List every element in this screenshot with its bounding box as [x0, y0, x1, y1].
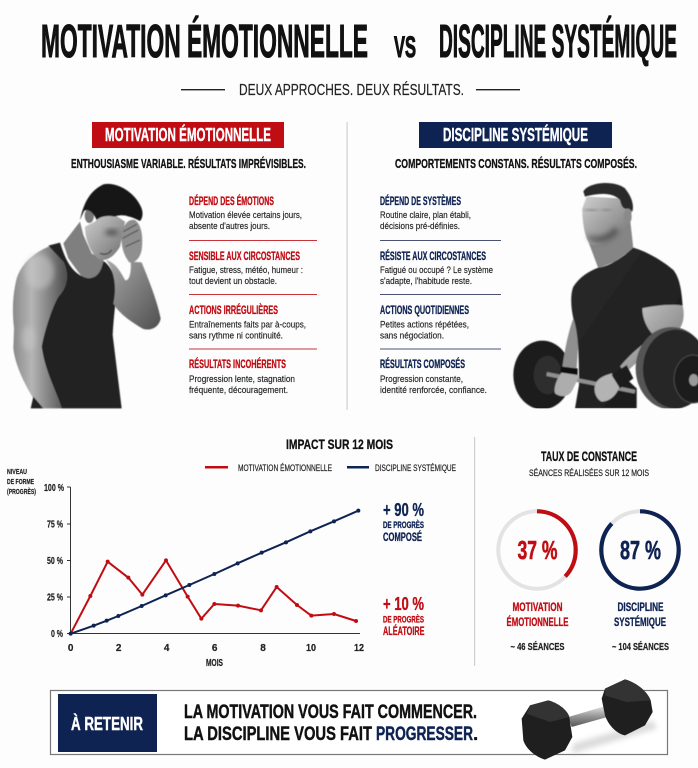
item: résiste aux circonstances — [380, 250, 493, 286]
item: actions irrégulières — [189, 304, 306, 340]
item: résiste aux circonstances: RÉSISTE AUX CIRCOSTANCES — [380, 250, 486, 263]
vertical divider — [474, 437, 475, 666]
label: discipline — [614, 602, 666, 629]
takeaway text: LA MOTIVATION VOUS FAIT COMMENCER. — [184, 702, 477, 723]
constance title: TAUX DE CONSTANCE — [541, 449, 637, 464]
takeaway text: LA DISCIPLINE VOUS FAIT — [184, 724, 372, 745]
y-axis title: NIVEAU — [7, 467, 27, 476]
item: résultats incohérents — [189, 358, 295, 395]
callout: +10 %: ALÉATOIRE — [383, 625, 425, 638]
axis labels: 100 % — [44, 483, 64, 494]
badge: motivation — [92, 122, 284, 148]
item: dépend des émotions: absente d'autres jours. — [189, 221, 270, 231]
callout: +90 %: COMPOSÉ — [383, 531, 422, 544]
photo: man lifting barbell — [513, 183, 698, 410]
donut: 87 %: 87 % — [620, 535, 661, 565]
badge: discipline — [419, 122, 612, 148]
item: actions quotidiennes: Petites actions répétées, — [380, 320, 469, 330]
item: résultats incohérents: Progression lente, stagnation — [189, 374, 295, 384]
chart axes — [67, 487, 360, 634]
axis labels: MOIS — [206, 658, 223, 669]
callout: +90 %: DE PROGRÈS — [383, 520, 424, 531]
axis labels: 4 — [164, 643, 170, 654]
callout: +10 %: DE PROGRÈS — [383, 614, 424, 626]
label: motivation — [506, 602, 569, 629]
takeaway text — [184, 702, 478, 745]
badge: motivation: MOTIVATION ÉMOTIONNELLE — [105, 124, 271, 145]
center divider — [346, 122, 348, 410]
item: résultats composés: RÉSULTATS COMPOSÉS — [380, 358, 465, 371]
item: sensible aux circonstances — [189, 251, 303, 286]
item: actions quotidiennes — [380, 305, 469, 340]
axis labels: 10 — [306, 643, 316, 654]
callout: +10 %: + 10 % — [383, 594, 424, 614]
axis labels: 8 — [260, 643, 266, 654]
item: résiste aux circonstances: s'adapte, l'habitude reste. — [380, 276, 472, 286]
item: actions quotidiennes: sans négociation. — [380, 330, 444, 340]
axis labels: 0 — [68, 643, 74, 654]
axis labels: 0 % — [51, 629, 63, 640]
callout: +90 % — [383, 500, 424, 544]
badge: discipline: DISCIPLINE SYSTÉMIQUE — [443, 124, 588, 145]
y-axis title: (PROGRÈS) — [7, 487, 36, 496]
takeaway text: . — [473, 724, 478, 745]
item: actions quotidiennes: ACTIONS QUOTIDIENNES — [380, 305, 469, 317]
item: résultats composés: identité renforcée, confiance. — [380, 385, 487, 395]
item: sensible aux circonstances: Fatigue, stress, météo, humeur : — [189, 265, 303, 275]
item: sensible aux circonstances: tout devient un obstacle. — [189, 276, 277, 286]
donut: 37 %: 37 % — [518, 535, 558, 565]
item: actions irrégulières: Entraînements faits par à-coups, — [189, 320, 306, 330]
count: 104 séances: ~ 104 SÉANCES — [612, 640, 669, 653]
panel: discipline — [380, 122, 698, 410]
chart legend — [205, 463, 456, 474]
label: motivation: MOTIVATION — [512, 602, 562, 614]
panel: motivation — [13, 122, 317, 408]
item: résiste aux circonstances: Fatigué ou occupé ? Le système — [380, 265, 493, 275]
item: actions irrégulières: ACTIONS IRRÉGULIÈRES — [189, 304, 278, 317]
axis labels: 6 — [212, 643, 218, 654]
y-axis title — [7, 467, 36, 496]
badge: à retenir — [58, 694, 157, 752]
motivation tagline: ENTHOUSIASME VARIABLE. RÉSULTATS IMPRÉVISIBLES. — [71, 156, 306, 171]
callout: +90 %: + 90 % — [383, 500, 424, 520]
title: MOTIVATION ÉMOTIONNELLE — [41, 15, 368, 67]
callout banner: à retenir — [50, 679, 668, 760]
callout: +10 % — [383, 594, 425, 638]
item: dépend de systèmes: Routine claire, plan établi, — [380, 210, 471, 220]
item: dépend des émotions: DÉPEND DES ÉMOTIONS — [189, 195, 274, 208]
line: motivation — [71, 558, 358, 634]
item: résultats composés: Progression constante, — [380, 374, 463, 384]
line: discipline — [69, 509, 360, 636]
takeaway text: PROGRESSER — [376, 724, 473, 745]
badge: à retenir: À RETENIR — [71, 713, 143, 734]
subtitle: DEUX APPROCHES. DEUX RÉSULTATS. — [239, 82, 464, 99]
constance subtitle: SÉANCES RÉALISÉES SUR 12 MOIS — [529, 468, 649, 479]
item: dépend des émotions — [189, 195, 302, 231]
axis labels: 50 % — [47, 556, 63, 567]
item: actions irrégulières: sans rythme ni continuité. — [189, 330, 283, 340]
photo: tired man — [13, 184, 161, 408]
y-axis title: DE FORME — [7, 477, 34, 486]
icon: dumbbell — [522, 679, 657, 760]
item: résultats composés — [380, 358, 487, 395]
item: résultats incohérents: RÉSULTATS INCOHÉRENTS — [189, 358, 286, 371]
item: dépend de systèmes: DÉPEND DE SYSTÈMES — [380, 195, 461, 208]
item: résultats incohérents: fréquente, découragement. — [189, 385, 288, 395]
axis labels: 75 % — [47, 520, 63, 530]
chart legend: DISCIPLINE SYSTÉMIQUE — [375, 463, 456, 474]
item: sensible aux circonstances: SENSIBLE AUX CIRCOSTANCES — [189, 251, 300, 263]
label: motivation: ÉMOTIONNELLE — [506, 616, 569, 629]
axis labels: 25 % — [47, 592, 63, 604]
line chart — [44, 483, 364, 669]
chart legend: MOTIVATION ÉMOTIONNELLE — [238, 463, 332, 474]
label: discipline: DISCIPLINE — [618, 602, 664, 614]
label: discipline: SYSTÉMIQUE — [614, 616, 666, 629]
axis labels — [44, 483, 364, 669]
axis labels: 12 — [354, 643, 364, 654]
donut: 37 % — [498, 511, 576, 589]
section title: impact: IMPACT SUR 12 MOIS — [286, 436, 393, 452]
item: dépend de systèmes — [380, 195, 471, 231]
donut: 87 % — [601, 511, 679, 589]
item: dépend de systèmes: décisions pré-définies. — [380, 221, 460, 231]
axis labels: 2 — [116, 643, 122, 654]
panel: taux de constance — [498, 449, 679, 653]
title: VS — [394, 31, 416, 64]
item: dépend des émotions: Motivation élevée certains jours, — [189, 210, 302, 220]
count: 46 séances: ~ 46 SÉANCES — [510, 640, 565, 653]
